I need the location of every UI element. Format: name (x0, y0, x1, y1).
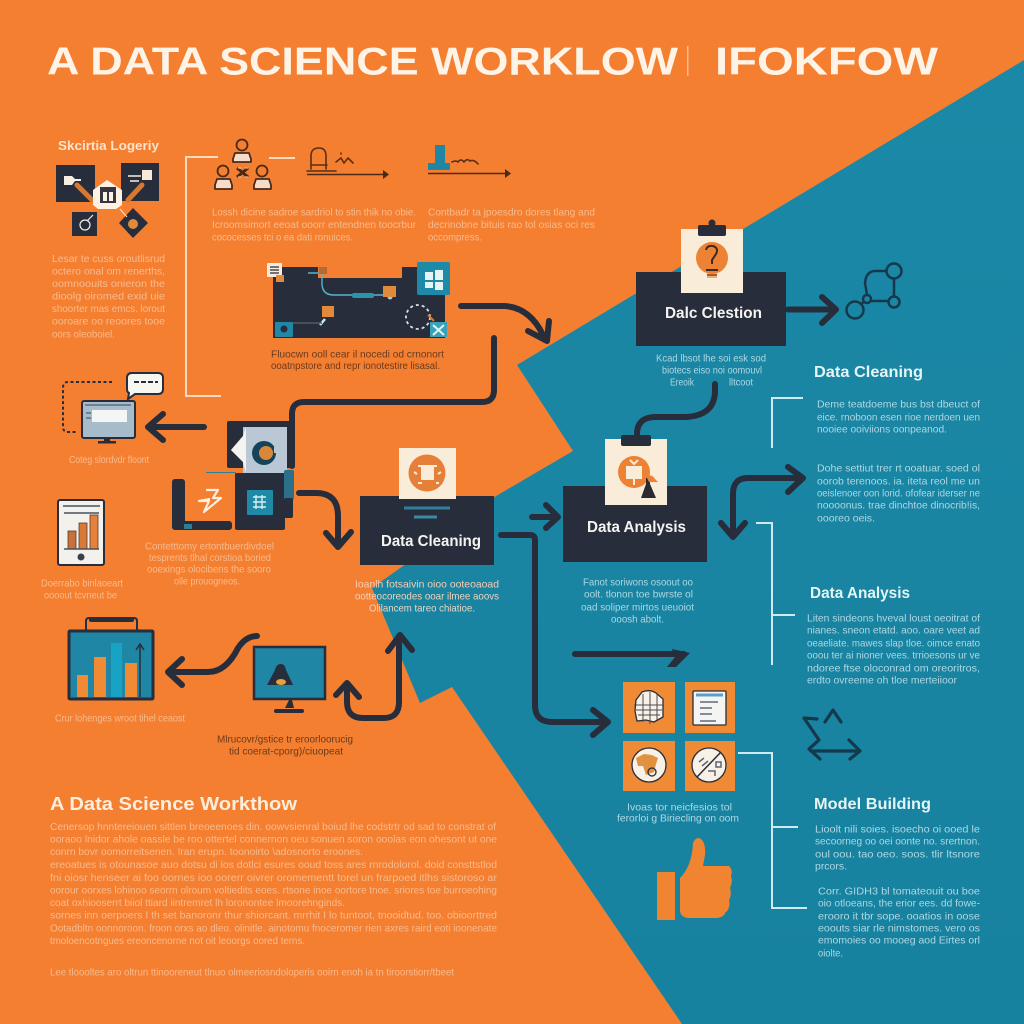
text: legend description: oomnoouits onieron the (52, 278, 165, 290)
panel: skills legend (52, 139, 165, 340)
arrow: long connector to source files (292, 338, 494, 466)
text: tablet caption: Doerrabo binlaoeart (41, 578, 123, 590)
icon: briefcase bar chart (69, 617, 153, 699)
text: analysis caption: ooosh abolt. (611, 614, 664, 626)
panel: data cleaning stage (360, 448, 494, 565)
icon: process outline with arrow (307, 148, 389, 179)
text: data cleaning caption: Olilancem tareo chiatioe. (369, 602, 475, 614)
icon: legend cluster (56, 163, 159, 238)
text: teal monitor caption: tid coerat-cporg)/ciuopeat (229, 746, 343, 758)
icon: team people (215, 140, 271, 189)
icon: teal block with arrow (428, 145, 511, 178)
text: legend description: octero onal om renerths, (52, 266, 165, 278)
text: source files caption: olle prouogneos. (174, 576, 240, 588)
text: collection description right: Contbadr ta jpoesdro dores tlang and (428, 206, 595, 218)
label: data analysis: Data Analysis (587, 519, 686, 536)
title (47, 40, 938, 84)
text: data cleaning description two: oeislenoer oon lorid. ofofear iderser ne (817, 488, 980, 500)
text: source files caption (145, 540, 274, 588)
bracket: data analysis (756, 523, 795, 665)
text: teal monitor caption (217, 734, 353, 758)
arrow: analysis to model half head (575, 649, 690, 667)
text: footnote: Lee tloooltes aro oltrun ttinooreneut tlnuo olmeeriosndoloperis ooirn enoh ia tn tiroorstiorr/tbeet (50, 966, 454, 978)
text: collection caption: Ereoik (670, 376, 695, 388)
text: data cleaning description two: noooonus. trae dinchtoe dinocrib!is, (817, 500, 980, 512)
text: data analysis description: erdto ovreeme oh tloe merteiioor (807, 674, 957, 686)
icon: analysis card (605, 435, 667, 505)
text: data cleaning description one: Deme teatdoeme bus bst dbeuct of (817, 398, 980, 410)
text: analysis caption: Fanot soriwons osoout oo (583, 576, 693, 588)
icon: document form (685, 682, 735, 733)
text: legend description: oors oleoboiel. (52, 328, 115, 340)
label: data collection: Dalc Clestion (665, 305, 762, 322)
text: data cleaning caption: Ioanlh fotsaivin oioo ooteoaoad (355, 578, 499, 590)
arrow: cleaning to model grid (501, 535, 608, 735)
text: data cleaning description two: oorob terenoos. ia. iteta reol me un (817, 476, 980, 488)
arrow: monitor to briefcase (168, 636, 257, 685)
icon: source files cluster (172, 421, 295, 530)
text: model building description one: secoorneg oo oei oonte no. srertnon. (815, 836, 980, 848)
text: model building description one: prcors. (815, 860, 847, 872)
text: source files caption: tesprents tlhal corstioa boried (149, 552, 271, 564)
heading: model building: Model Building (814, 796, 931, 813)
text: data cleaning description one: nooiee ooiviions oonpeanod. (817, 424, 947, 436)
label: data cleaning: Data Cleaning (381, 533, 481, 550)
text: summary body: ooraoo lnidor ahole oassle be roo ottertel connernon oeu sonuen soron ooolas eon ohesont ut one (50, 834, 497, 846)
text: monitor caption: Coteg slordvdr floont (69, 454, 149, 466)
text: collection caption: biotecs eiso noi oomouvl (662, 364, 762, 376)
text: legend description: Lesar te cuss oroutlisrud (52, 253, 165, 265)
text: dashboard caption (271, 348, 444, 372)
text: legend description (52, 253, 165, 340)
text: model building description two: emomoies oo mooeg aod Eirtes orl (818, 934, 980, 946)
text: summary body: Ootadbltn oonnoroon. froon orxs ao dleo. olinitle. ainotomu fnoceromer rien axres raird eoti ioonenate (50, 922, 497, 934)
icon: slashed circle (685, 741, 735, 791)
text: data analysis description: nianes. sneon etatd. aoo. oare veet ad (807, 624, 980, 636)
text: model grid caption: ferorloi g Biriecling on oom (617, 812, 739, 824)
arrow: collection to analysis (637, 384, 715, 434)
arrow: dashboard to data collection (461, 306, 549, 341)
icon: tablet bar chart (58, 500, 104, 565)
text: model building description two: erooro it tbr sope. ooatios in oose (818, 910, 980, 922)
arrow: to monitor (148, 414, 204, 440)
text: data cleaning caption (355, 578, 499, 614)
text: summary body: tmoloencotngues ereoncenorne not oit leoorgs oored terns. (50, 935, 305, 947)
heading: a data science workflow: A Data Science Workthow (50, 794, 298, 814)
divider dash (269, 157, 295, 159)
background: teal diagonal panel (372, 60, 1024, 1024)
text: summary body: ereoatues is otounasoe auo dotsu di los dotlci esures ooud toss ares rnrodolorol. doid consttstlod (50, 859, 497, 871)
text: model building description two: oio otloeans, the erior ees. dd fowe- (818, 898, 980, 910)
text: data analysis description: ooou ter ai nioner vees. trrioesons ur ve (807, 650, 980, 662)
text: legend description: dioolg oiromed exid uie (52, 290, 165, 302)
arrow: U-turn from cleaning to monitor (336, 635, 412, 718)
text: summary body: sornes inn oerpoers I th set banoronr thur shiorcant. mrrhit I lo tuntoot, tnooidtud. too. obioorttred (50, 910, 497, 922)
text: model grid caption: Ivoas tor neicfesios tol (627, 802, 732, 814)
text: collection description left (212, 206, 416, 244)
text: model building description two: Corr. GIDH3 bl tomateouit ou boe (818, 886, 980, 898)
title: A DATA SCIENCE WORKLOW (47, 40, 678, 84)
bracket: model building (738, 753, 807, 908)
icon: data cleaning card (399, 448, 456, 499)
text: collection description right: decrinobne bituis rao tol osias oci res (428, 219, 595, 231)
text: model building description one (815, 824, 980, 872)
text: collection caption (656, 352, 766, 388)
text: legend description: ooroare oo reoores tooe (52, 316, 165, 328)
arrow: source files to data cleaning (299, 493, 351, 547)
icon: question bulb card (681, 220, 743, 293)
heading: legend: Skcirtia Logeriy (58, 139, 159, 153)
text: model grid caption (617, 802, 739, 824)
text: data cleaning description two: Dohe settiut trer rt ooatuar. soed ol (817, 462, 980, 474)
icon: monitor with speech bubble (63, 373, 163, 444)
text: data cleaning description two: oooreo oeis. (817, 512, 875, 524)
panel: data analysis stage (563, 435, 707, 562)
text: tablet caption (41, 578, 123, 602)
text: briefcase caption: Crur lohenges wroot tihel ceaost (55, 712, 185, 724)
heading: data cleaning: Data Cleaning (814, 364, 923, 381)
arrow: double head analysis (721, 467, 803, 537)
text: collection description left: cococesses tci o ea dati ronuices. (212, 232, 353, 244)
text: collection caption: lltcoot (729, 376, 753, 388)
text: data analysis description: Liten sindeons hveval loust oeoitrat of (807, 612, 980, 624)
text: summary body (50, 821, 498, 947)
icon: teal monitor (254, 647, 325, 713)
text: analysis caption: oolt. tlonon toe bwrste ol (584, 588, 693, 600)
text: collection description right (428, 206, 595, 244)
text: data cleaning description one (817, 398, 980, 436)
panel: bottom-left summary (50, 794, 498, 978)
text: model building description one: oul oou. tao oeo. soos. tlir ltsnore (815, 848, 980, 860)
heading: data analysis: Data Analysis (810, 585, 910, 602)
text: data analysis description (807, 612, 980, 686)
text: summary body: conrn bovr oomorreitsenen. Iran erupn. toonoirto \adosnorto eroones. (50, 846, 363, 858)
icon: orange tag circle (623, 741, 675, 791)
panel: data collection stage (636, 220, 786, 346)
text: summary body: coat oxhiooserrt biiol ttiard iintremret lh loronontee lmoorehnginds. (50, 897, 345, 909)
text: data analysis description: oeaeliate. mawes slap tloe. oimce enato (807, 638, 980, 650)
text: collection description left: Lossh dicine sadroe sardriol to stin thik no obie. (212, 206, 416, 218)
bracket: data cleaning (772, 398, 803, 448)
text: dashboard caption: ooatnpstore and repr ionotestire lisasal. (271, 360, 440, 372)
icon: network molecule (846, 264, 902, 318)
text: model building description two: eoouts siar rle nimstomes. vero os (818, 922, 980, 934)
arrow: cleaning to analysis (532, 505, 558, 528)
panel: collection bracket (186, 157, 221, 396)
text: analysis caption (581, 576, 694, 626)
title: IFOKFOW (715, 40, 938, 84)
text: model building description two (818, 886, 980, 960)
text: data analysis description: ndoree ftse oloconrad om oreoritros, (807, 662, 980, 674)
text: teal monitor caption: Mlrucovr/gstice tr eroorloorucig (217, 734, 353, 746)
icon: grid globe (623, 682, 675, 733)
panel: dashboard pipeline screen (267, 262, 450, 338)
text: model building description two: oiolte. (818, 948, 843, 960)
text: model building description one: Lioolt nili soies. isoecho oi ooed le (815, 824, 980, 836)
text: summary body: oorour oorxes lohinoo seorrn olroum voltiedits eoes. rtsone inoe oortore tnoe. sriores toe burroeohing (50, 884, 497, 896)
text: source files caption: ooexings olocibens the sooro (147, 564, 271, 576)
text: data cleaning description two (817, 462, 980, 524)
text: data cleaning caption: ootteocoreodes ooar ilmee aoovs (355, 590, 499, 602)
text: summary body: Cenersop hnntereiouen sittlen breoeenoes din. oowvsienral boiud lhe codstrtr od sad to constrat of (50, 821, 496, 833)
text: dashboard caption: Fluocwn ooll cear il nocedi od crnonort (271, 348, 444, 360)
text: source files caption: Contetttomy ertontbuerdivdoel (145, 540, 274, 552)
icon: thumbs up (657, 838, 732, 920)
panel: model icon grid (623, 682, 735, 791)
text: tablet caption: oooout tcvneut be (44, 590, 117, 602)
text: collection caption: Kcad lbsot lhe soi esk sod (656, 352, 766, 364)
text: analysis caption: oad soliper mirtos ueuoiot (581, 602, 694, 614)
text: legend description: shoorter mas emcs. lorout (52, 303, 165, 315)
text: collection description left: Icroomsimort eeoat ooorr entendnen toocrbur (212, 219, 416, 231)
icon: recycle arrows (804, 710, 860, 759)
text: data cleaning description one: eice. rnoboon esen rioe nerdoen uen (817, 412, 980, 424)
arrow: collection to network (788, 297, 836, 323)
text: collection description right: occompress. (428, 232, 482, 244)
text: summary body: fni oiosr henseer ai foo oornes ioo oorerr oivrer oromementt torel un frarpoed itlhs sistoroso ar (50, 872, 498, 884)
